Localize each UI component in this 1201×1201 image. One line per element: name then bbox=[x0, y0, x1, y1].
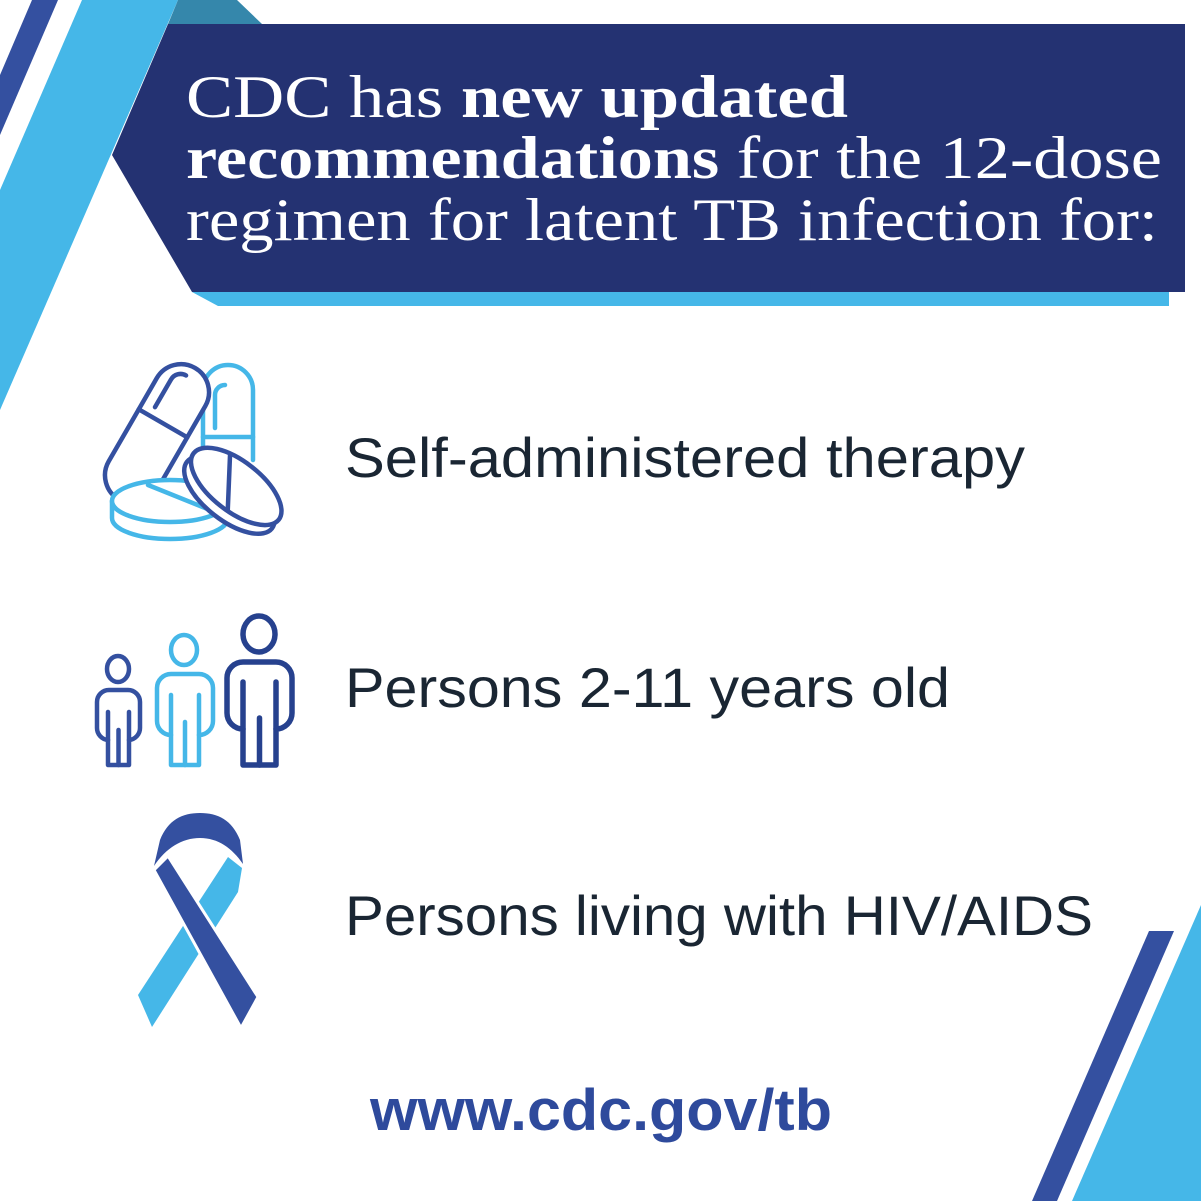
text: self-administered: Self-administered therapy bbox=[345, 426, 1025, 489]
icon: awareness ribbon bbox=[138, 813, 258, 1028]
icon: people bbox=[97, 616, 292, 765]
icon: pills bbox=[95, 354, 294, 548]
title banner bbox=[112, 24, 1185, 292]
headline text bbox=[186, 64, 1162, 253]
url: www.cdc.gov/tb bbox=[369, 1078, 832, 1143]
text: HIV/AIDS: Persons living with HIV/AIDS bbox=[345, 884, 1093, 947]
headline text: CDC has new updated bbox=[186, 64, 848, 130]
headline text: recommendations for the 12-dose bbox=[186, 125, 1162, 191]
text: persons 2-11: Persons 2-11 years old bbox=[345, 656, 950, 719]
headline text: regimen for latent TB infection for: bbox=[186, 187, 1158, 253]
